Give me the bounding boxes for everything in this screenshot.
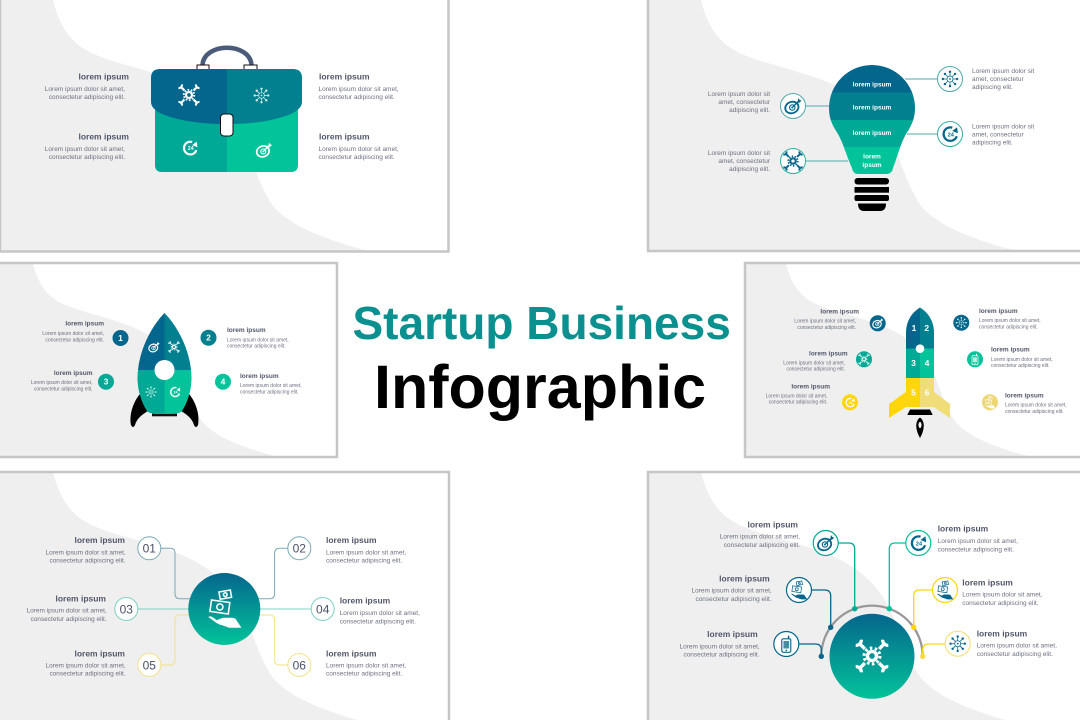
title: Startup Business: [352, 297, 731, 349]
text block: bottom right: Lorem ipsum dolor sit amet,: [977, 643, 1057, 650]
rocket graphic: 4: [925, 358, 930, 368]
text block: item 2: Lorem ipsum dolor sit amet,: [979, 318, 1041, 324]
icon circle: target: [813, 530, 838, 556]
text block: middle left: consectetur adipiscing elit.: [695, 596, 772, 603]
text block: right top: Lorem ipsum dolor sit: [972, 68, 1034, 75]
rocket graphic: [889, 308, 950, 438]
text block: left bottom: Lorem ipsum dolor sit: [708, 150, 770, 157]
icon: network: [254, 88, 269, 103]
text block 03: consectetur adipiscing elit.: [30, 616, 107, 623]
text block: item 4: Lorem ipsum dolor sit amet,: [991, 357, 1053, 363]
text block: right top: adipiscing elit.: [972, 84, 1013, 91]
text block: step 1: Lorem ipsum dolor sit amet,: [42, 331, 104, 337]
text block 05: consectetur adipiscing elit.: [49, 671, 126, 678]
text block 02: Lorem ipsum dolor sit amet,: [326, 549, 406, 556]
connector dots: [819, 606, 925, 659]
connectors: [138, 548, 311, 665]
text block: left top: Lorem ipsum dolor sit: [708, 91, 770, 98]
text block: bottom right: consectetur adipiscing elit.: [977, 651, 1053, 658]
text block: step 2: Lorem ipsum dolor sit amet,: [227, 338, 289, 344]
text block: bottom right: lorem ipsum: [319, 132, 370, 142]
step 3 badge: [98, 374, 114, 390]
text block 04: lorem ipsum: [340, 596, 391, 606]
text block: bottom right: consectetur adipiscing elit.: [318, 154, 395, 161]
text block: bottom left: Lorem ipsum dolor sit amet,: [679, 643, 760, 650]
text block: bottom left: consectetur adipiscing elit.: [49, 154, 125, 161]
text block 02: lorem ipsum: [326, 535, 377, 545]
text block: top left: Lorem ipsum dolor sit amet,: [720, 534, 800, 541]
step 4 badge: [215, 374, 231, 390]
text block: step 2: lorem ipsum: [227, 327, 266, 334]
text block: top right: lorem ipsum: [319, 72, 370, 82]
panel: semicircle hub slide: [648, 472, 1080, 720]
icon circle: network: [945, 631, 970, 656]
text block: top left: consectetur adipiscing elit.: [49, 94, 125, 101]
text block: item 5: Lorem ipsum dolor sit amet,: [766, 393, 827, 399]
icon circle: network: [938, 66, 962, 92]
rocket graphic: 1: [912, 323, 917, 333]
node 04: 04: [316, 602, 330, 616]
text block 02: consectetur adipiscing elit.: [326, 558, 402, 564]
node 01: 01: [143, 542, 156, 556]
text block: bottom left: Lorem ipsum dolor sit amet,: [45, 146, 125, 153]
text block: bottom right: lorem ipsum: [977, 628, 1028, 638]
text block: bottom left: lorem ipsum: [707, 629, 758, 639]
text block: step 4: consectetur adipiscing elit.: [240, 390, 299, 396]
text block: item 1: Lorem ipsum dolor sit amet,: [794, 319, 856, 325]
text block 06: Lorem ipsum dolor sit amet,: [326, 662, 406, 669]
rocket graphic: 3: [911, 358, 916, 368]
step 2 badge: [200, 330, 216, 346]
text block 03: Lorem ipsum dolor sit amet,: [26, 608, 107, 615]
rocket fins: [130, 394, 199, 427]
icon circle: phone: [774, 632, 799, 656]
central hub with gear icon: [830, 614, 914, 699]
text block: left bottom: amet, consectetur: [718, 158, 771, 165]
icon circle: gear: [780, 148, 806, 174]
text block 04: consectetur adipiscing elit.: [340, 618, 416, 625]
text block: bottom left: lorem ipsum: [78, 132, 129, 142]
node 06: [288, 654, 311, 676]
node 03: [115, 598, 138, 620]
text block: item 4: consectetur adipiscing elit.: [991, 363, 1050, 369]
node 05: 05: [143, 658, 156, 672]
light bulb: ipsum: [862, 162, 882, 169]
rocket nozzle: [907, 410, 933, 415]
text block: left top: adipiscing elit.: [729, 107, 770, 114]
text block: right bottom: amet, consectetur: [972, 132, 1024, 138]
icon: 24 hours: [184, 142, 197, 154]
icon circle: money hand yellow: [932, 578, 958, 602]
light bulb: lorem ipsum: [853, 130, 892, 137]
text block 04: Lorem ipsum dolor sit amet,: [340, 610, 420, 617]
rocket flame: [916, 418, 924, 438]
text block: top left: consectetur adipiscing elit.: [724, 542, 800, 549]
light bulb: lorem ipsum: [853, 82, 892, 88]
text block: item 2: lorem ipsum: [979, 308, 1018, 315]
text block: item 3: Lorem ipsum dolor sit amet,: [783, 360, 845, 366]
step 1 badge: [112, 330, 128, 346]
icon: gear and wrenches: [178, 84, 200, 106]
text block: right bottom: Lorem ipsum dolor sit: [972, 124, 1034, 130]
node 01: [138, 537, 161, 560]
text block: step 4: lorem ipsum: [240, 373, 279, 380]
text block: item 3: lorem ipsum: [809, 350, 848, 357]
text block: top right: consectetur adipiscing elit.: [938, 546, 1014, 553]
badge: phone: [967, 351, 983, 367]
bulb base: [854, 178, 889, 211]
step 3 badge: 3: [104, 377, 109, 387]
gray arc: [821, 606, 923, 656]
text block: step 1: lorem ipsum: [65, 320, 104, 328]
text block: step 2: consectetur adipiscing elit.: [227, 344, 286, 350]
panel: briefcase slide: [0, 0, 448, 260]
light bulb: [829, 65, 915, 211]
icon circle: 24 hours: [906, 530, 931, 556]
text block: step 3: Lorem ipsum dolor sit amet,: [31, 380, 92, 386]
icon circle: target: [780, 94, 806, 118]
rocket graphic: 2: [924, 323, 929, 333]
badge: target: [870, 315, 886, 331]
step 4 badge: 4: [221, 377, 226, 387]
panel: numbered hub slide: [0, 472, 449, 720]
text block: left top: amet, consectetur: [718, 99, 771, 106]
rocket graphic: 6: [925, 388, 930, 398]
text block 01: lorem ipsum: [74, 535, 125, 545]
text block: middle right: lorem ipsum: [962, 577, 1013, 587]
icon circle: money hand: [786, 578, 812, 602]
text block: right top: amet, consectetur: [972, 76, 1024, 83]
text block: item 4: lorem ipsum: [991, 346, 1030, 353]
light bulb: lorem: [863, 154, 881, 160]
text block 05: Lorem ipsum dolor sit amet,: [45, 662, 126, 669]
node 05: [138, 654, 161, 676]
briefcase graphic: [151, 48, 302, 172]
text block: top left: lorem ipsum: [78, 72, 129, 82]
text block: middle right: consectetur adipiscing elit.: [962, 600, 1039, 607]
text block: top right: Lorem ipsum dolor sit amet,: [938, 538, 1018, 545]
text block: right bottom: adipiscing elit.: [972, 140, 1013, 146]
text block: step 4: Lorem ipsum dolor sit amet,: [240, 383, 302, 389]
text block: step 3: consectetur adipiscing elit.: [34, 386, 92, 392]
node 02: 02: [293, 542, 306, 556]
text block: item 5: lorem ipsum: [791, 383, 830, 390]
badge: network: [953, 315, 969, 331]
panel: rocket with six steps: [745, 263, 1080, 463]
text block: step 3: lorem ipsum: [54, 370, 93, 377]
badge: 24 hours: [842, 394, 858, 410]
text block: item 2: consectetur adipiscing elit.: [979, 324, 1038, 330]
text block 05: lorem ipsum: [74, 648, 125, 658]
briefcase handle: [202, 48, 252, 65]
icon circle: 24 hours: [938, 122, 962, 146]
text block: top right: consectetur adipiscing elit.: [318, 94, 395, 101]
text block: item 5: consectetur adipiscing elit.: [769, 400, 827, 406]
light bulb: lorem ipsum: [853, 104, 892, 112]
rocket graphic: 5: [911, 388, 916, 398]
panel: light bulb slide: [648, 0, 1080, 260]
connector lines: [805, 79, 938, 161]
badge: money hand: [982, 394, 998, 410]
text block: middle right: Lorem ipsum dolor sit amet,: [962, 592, 1043, 599]
text block: top left: Lorem ipsum dolor sit amet,: [45, 86, 125, 93]
text block: middle left: lorem ipsum: [719, 574, 770, 584]
text block: item 1: lorem ipsum: [820, 309, 859, 316]
step 1 badge: 1: [118, 333, 123, 343]
text block: top right: Lorem ipsum dolor sit amet,: [318, 86, 399, 93]
text block: step 1: consectetur adipiscing elit.: [45, 338, 104, 344]
icon: target: [255, 143, 272, 159]
text block 06: consectetur adipiscing elit.: [326, 671, 402, 678]
text block 06: lorem ipsum: [326, 648, 377, 658]
text block: top left: lorem ipsum: [747, 519, 798, 529]
text block 03: lorem ipsum: [55, 594, 106, 604]
text block: left bottom: adipiscing elit.: [729, 166, 770, 173]
text block: item 6: Lorem ipsum dolor sit amet,: [1005, 403, 1067, 409]
central hub with money icon: [188, 573, 260, 645]
step 2 badge: 2: [206, 333, 211, 343]
text block: middle left: Lorem ipsum dolor sit amet,: [691, 588, 772, 595]
text block: bottom left: consectetur adipiscing elit.: [683, 652, 760, 659]
connectors: [799, 543, 945, 656]
node 06: 06: [293, 658, 306, 672]
text block: item 6: lorem ipsum: [1005, 393, 1044, 400]
text block: item 3: consectetur adipiscing elit.: [786, 367, 845, 373]
node 04: [311, 598, 334, 620]
text block: bottom right: Lorem ipsum dolor sit amet,: [318, 146, 399, 153]
title: Infographic: [374, 353, 706, 421]
node 03: 03: [120, 602, 133, 616]
title: [352, 297, 731, 421]
panel: rocket with four steps: [0, 263, 337, 463]
text block: item 6: consectetur adipiscing elit.: [1005, 409, 1064, 415]
node 02: [288, 537, 311, 560]
text block 01: Lorem ipsum dolor sit amet,: [45, 549, 126, 556]
text block: item 1: consectetur adipiscing elit.: [797, 325, 856, 331]
text block: top right: lorem ipsum: [938, 524, 989, 534]
badge: gear: [856, 351, 872, 367]
text block 01: consectetur adipiscing elit.: [49, 558, 126, 564]
rocket graphic: [130, 313, 199, 427]
